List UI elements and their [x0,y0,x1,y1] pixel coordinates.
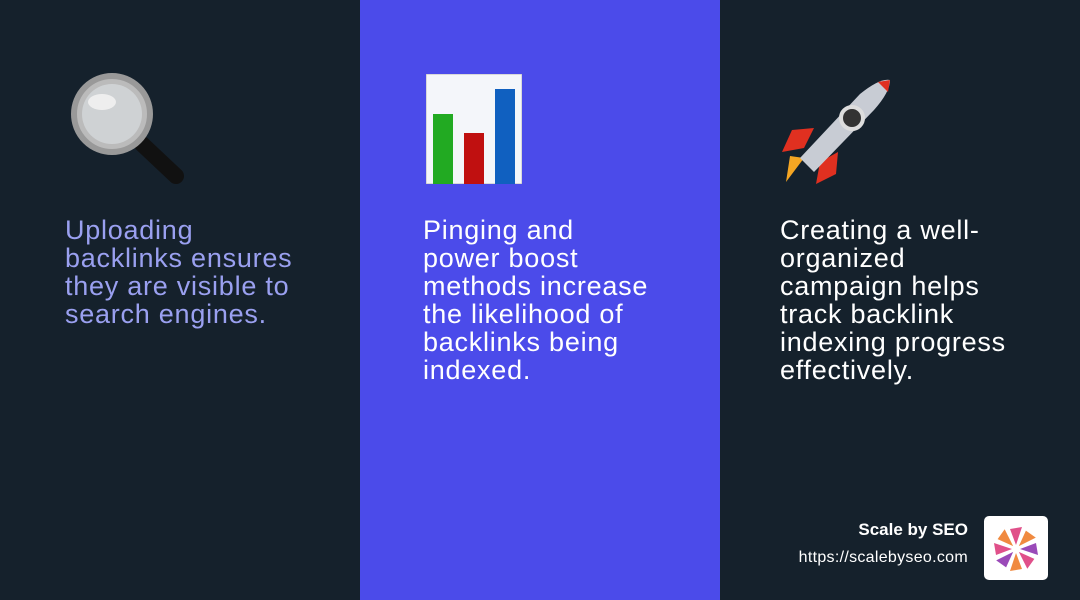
text: right [780,215,1006,385]
text: right: campaign helps [780,271,980,301]
text: middle: methods increase [423,271,648,301]
text: right: indexing progress [780,327,1006,357]
text: middle: Pinging and [423,215,574,245]
panel: middle [360,0,720,600]
icon: bar chart [426,74,522,184]
text: right: track backlink [780,299,954,329]
panel: right [720,0,1080,600]
brand url: https://scalebyseo.com [799,549,968,566]
text: middle: the likelihood of [423,299,623,329]
text: left: backlinks ensures [65,243,292,273]
text: right: Creating a well- [780,215,980,245]
brand name: Scale by SEO [858,520,968,539]
text: right: effectively. [780,355,914,385]
icon: rocket [782,80,890,184]
text: middle [423,215,648,385]
text: right: organized [780,243,905,273]
text: left: Uploading [65,215,193,245]
text: left [65,215,292,329]
text: middle: indexed. [423,355,531,385]
icon: magnifying glass [71,73,184,184]
panel: left [0,0,360,600]
text: middle: backlinks being [423,327,619,357]
text: left: search engines. [65,299,267,329]
text: middle: power boost [423,243,578,273]
logo [984,516,1048,580]
brand block [799,516,1048,580]
text: left: they are visible to [65,271,289,301]
